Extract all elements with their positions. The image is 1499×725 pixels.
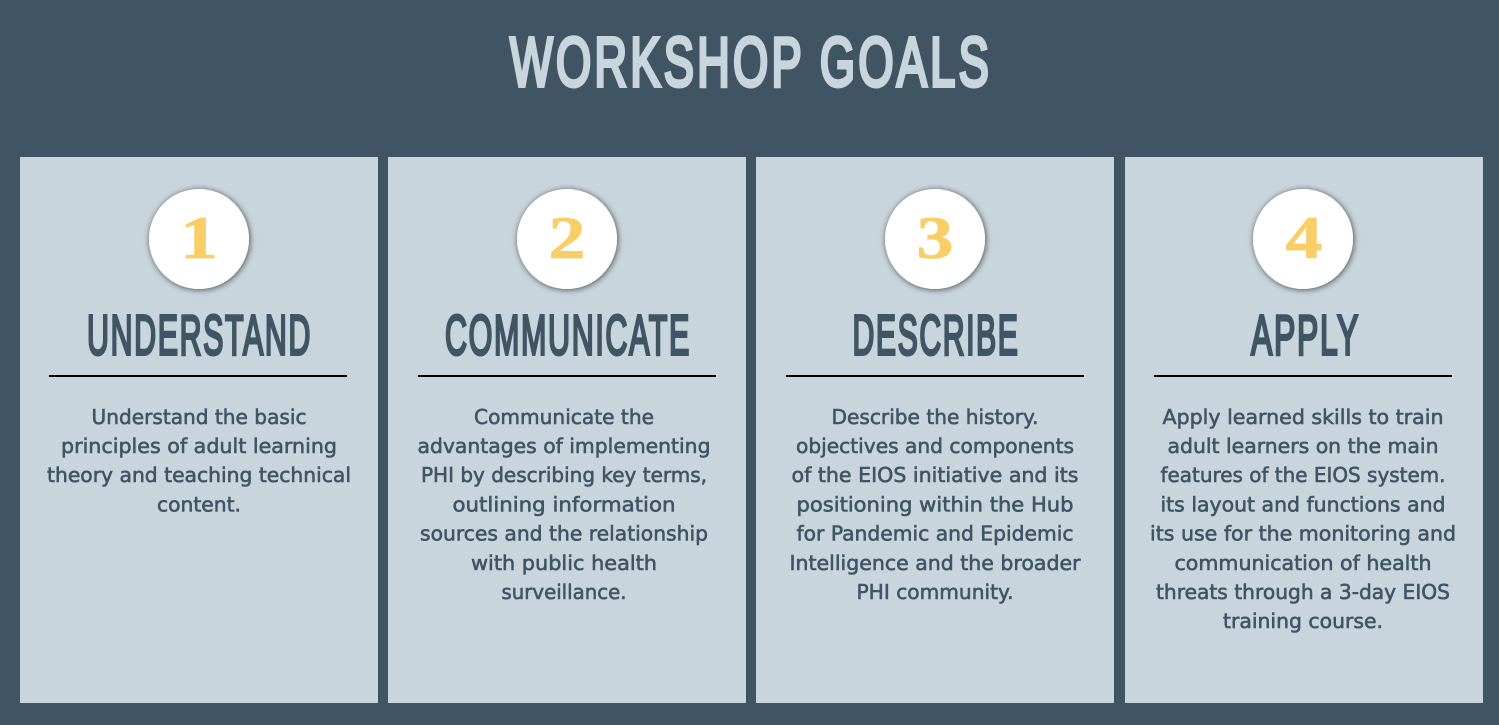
text block: communicate description: [418, 405, 710, 604]
panel: communicate: [388, 157, 746, 703]
text block: understand description: content.: [157, 492, 241, 516]
text block: describe description: Describe the history.: [832, 405, 1038, 429]
heading: describe: DESCRIBE: [852, 304, 1020, 368]
text block: communicate description: PHI by describing key terms,: [421, 463, 707, 487]
text block: communicate description: advantages of implementing: [418, 434, 710, 458]
panel background: [756, 157, 1114, 703]
heading: understand: UNDERSTAND: [87, 304, 312, 368]
text block: describe description: positioning within the Hub: [796, 492, 1074, 516]
text block: understand description: Understand the basic: [92, 405, 306, 429]
text block: describe description: objectives and components: [796, 434, 1074, 458]
text block: describe description: of the EIOS initiative and its: [792, 463, 1078, 487]
text block: apply description: communication of health: [1174, 551, 1432, 575]
text block: apply description: threats through a 3-day EIOS: [1156, 580, 1450, 604]
text block: apply description: adult learners on the main: [1168, 434, 1438, 458]
icon: number 2 badge: 2: [548, 205, 586, 271]
icon: number 4 badge: [1253, 189, 1353, 289]
text block: describe description: [790, 405, 1081, 604]
panel: apply: [1125, 157, 1483, 703]
heading: apply: APPLY: [1251, 304, 1360, 368]
text block: understand description: principles of adult learning: [61, 434, 337, 458]
text block: communicate description: outlining information: [452, 492, 676, 516]
text block: apply description: training course.: [1223, 609, 1383, 633]
icon: number 1 badge: [149, 189, 249, 289]
text block: apply description: Apply learned skills to train: [1162, 405, 1444, 429]
text block: communicate description: surveillance.: [502, 580, 626, 604]
icon: number 3 badge: [885, 189, 985, 289]
text block: communicate description: Communicate the: [474, 405, 654, 429]
text block: apply description: [1150, 405, 1456, 633]
panel: understand: [20, 157, 378, 703]
title: WORKSHOP GOALS: [510, 23, 992, 101]
text block: apply description: its layout and functions and: [1160, 492, 1446, 516]
text block: understand description: [47, 405, 351, 516]
icon: number 4 badge: 4: [1286, 205, 1322, 271]
icon: number 3 badge: 3: [916, 205, 954, 271]
panel background: [20, 157, 378, 703]
panel background: [388, 157, 746, 703]
heading: communicate: COMMUNICATE: [445, 304, 691, 368]
text block: describe description: for Pandemic and Epidemic: [796, 522, 1074, 546]
panel: describe: [756, 157, 1114, 703]
text block: communicate description: with public health: [471, 551, 657, 575]
text block: describe description: Intelligence and the broader: [790, 551, 1081, 575]
text block: communicate description: sources and the relationship: [420, 522, 708, 546]
text block: describe description: PHI community.: [856, 580, 1014, 604]
panel background: [1125, 157, 1483, 703]
text block: apply description: features of the EIOS system.: [1160, 463, 1446, 487]
icon: number 1 badge: 1: [180, 205, 218, 271]
text block: apply description: its use for the monitoring and: [1150, 522, 1456, 546]
text block: understand description: theory and teaching technical: [47, 463, 351, 487]
icon: number 2 badge: [517, 189, 617, 289]
